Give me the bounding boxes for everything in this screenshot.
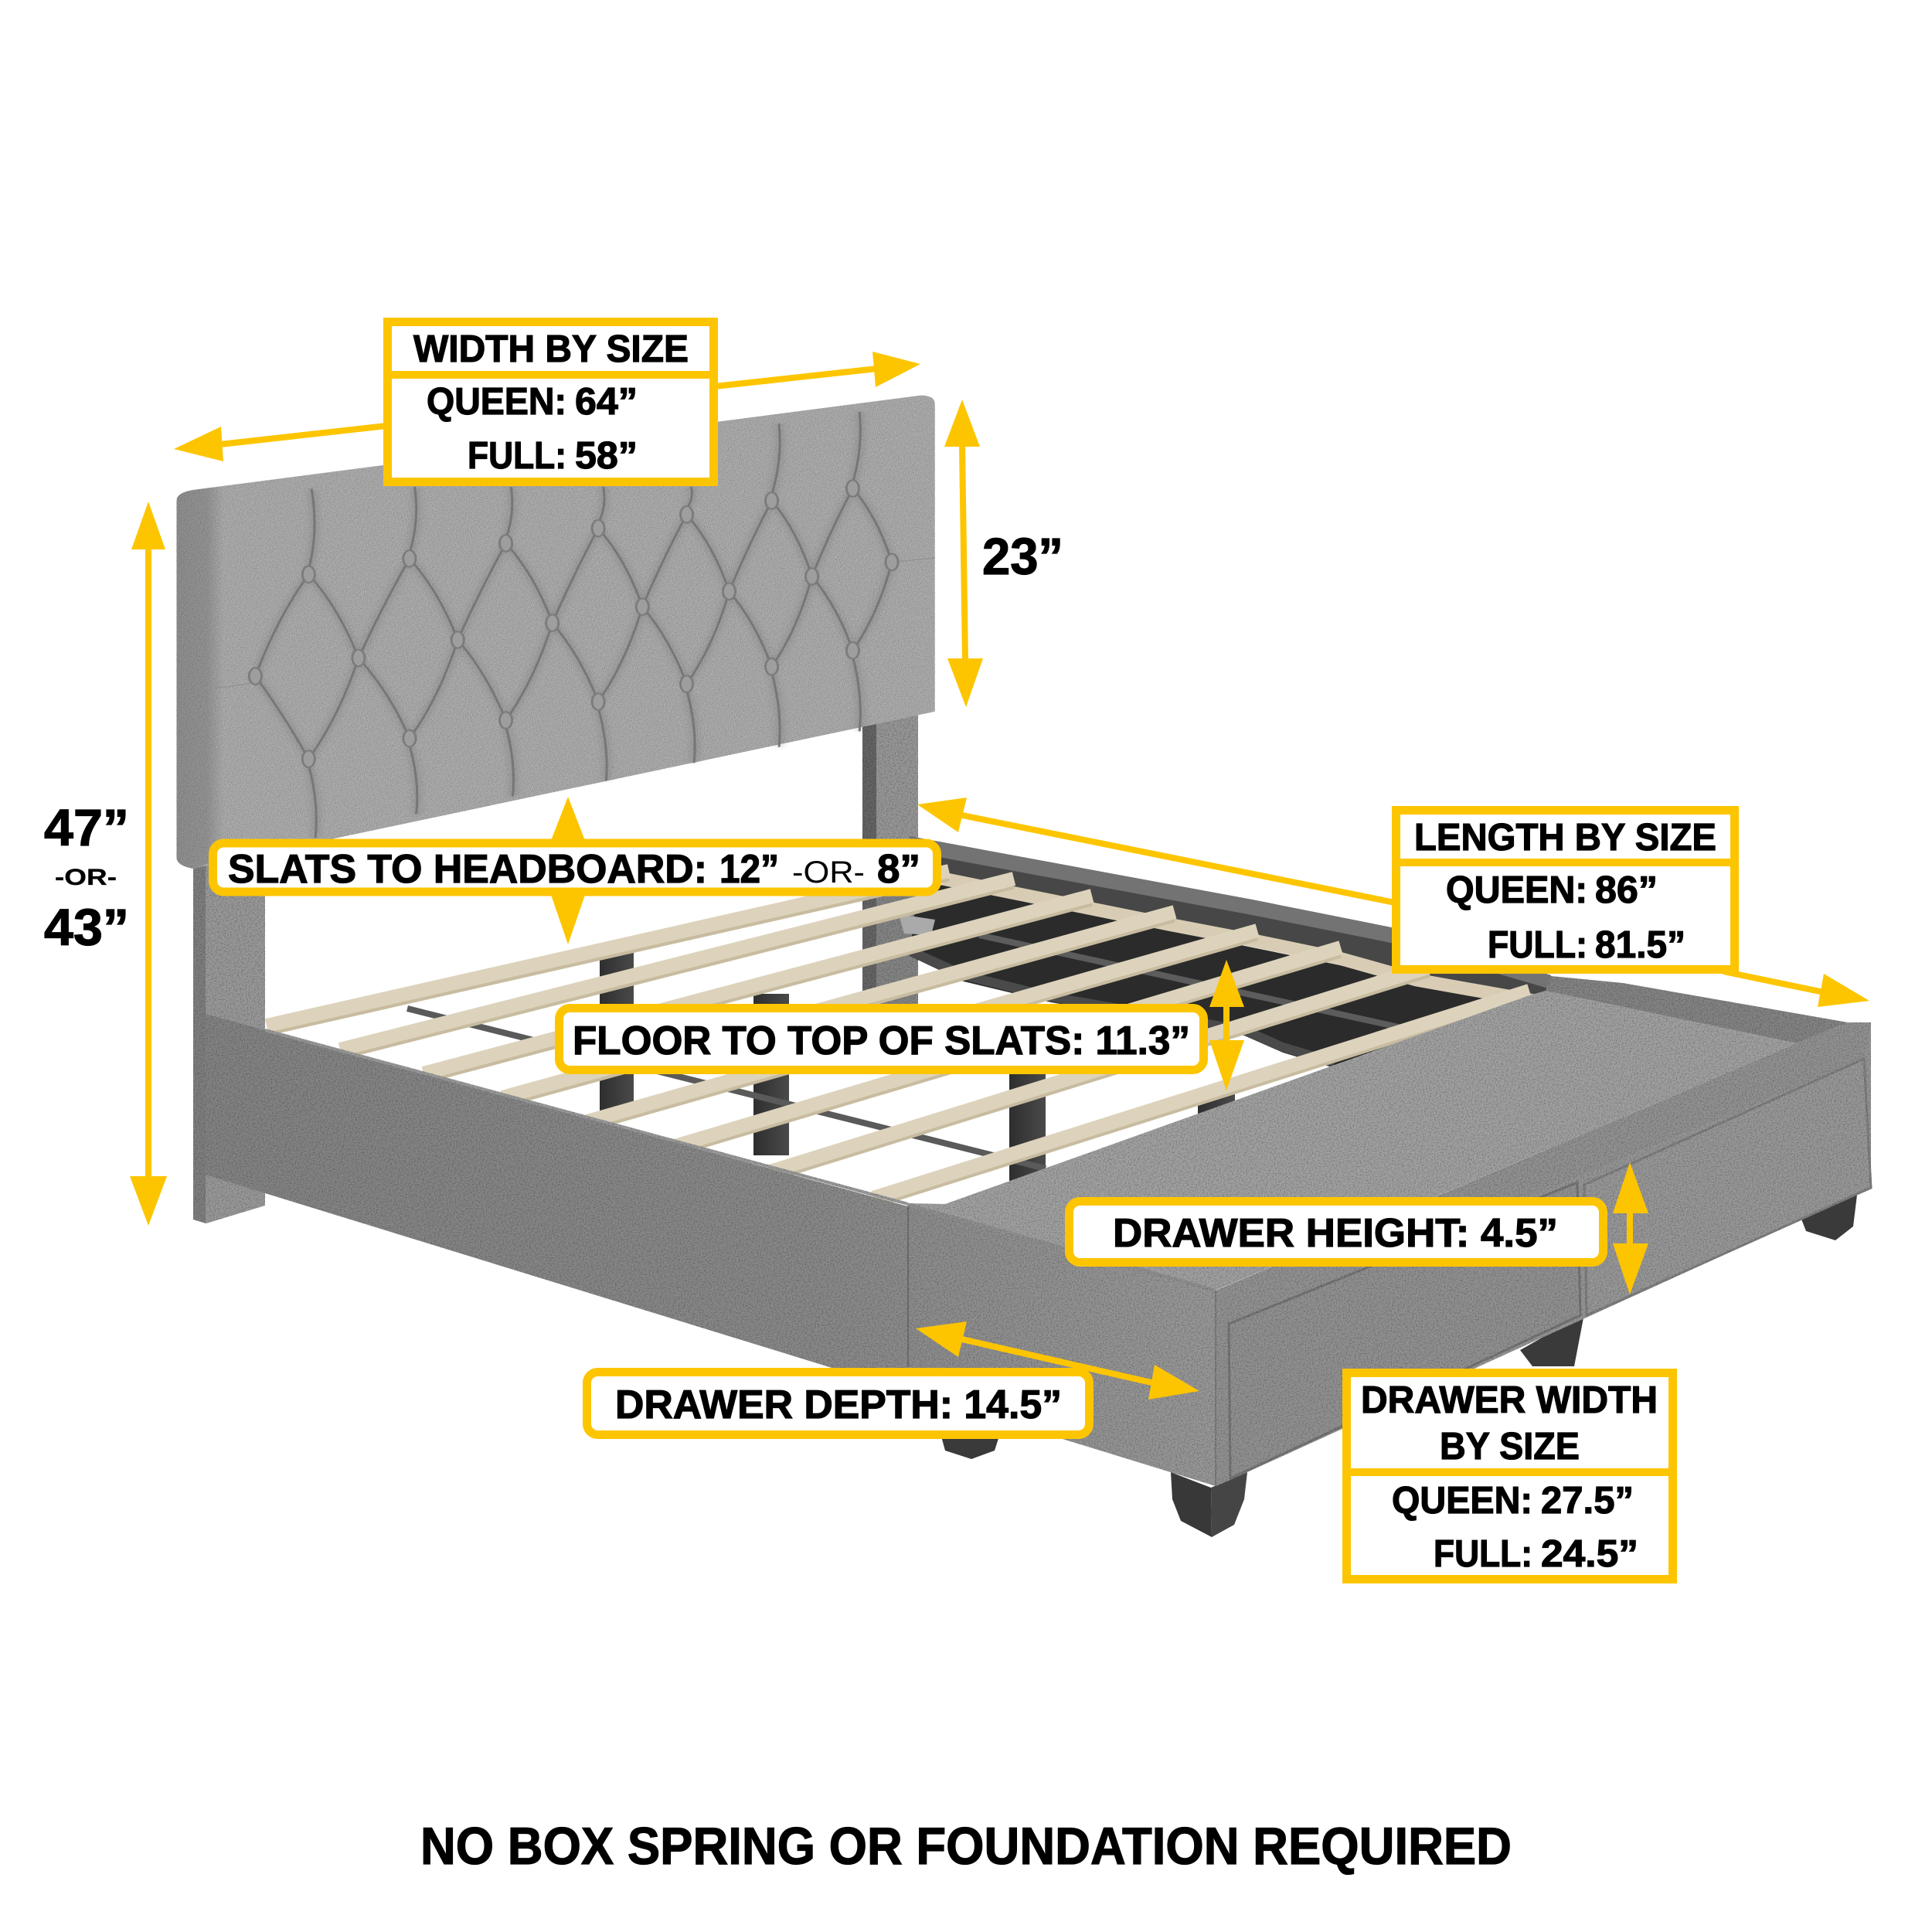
drawer depth label: DRAWER DEPTH: 14.5”	[615, 1383, 1062, 1427]
total height label: 43”	[44, 899, 129, 957]
drawer width by size box	[1342, 1372, 1677, 1580]
upholstered panel	[176, 396, 935, 869]
front foot	[1171, 1472, 1247, 1537]
front lip	[1216, 1022, 1871, 1486]
floor to top of slats label: FLOOR TO TOP OF SLATS: 11.3”	[573, 1019, 1190, 1063]
drawer width by size box: 27.5”	[1541, 1480, 1634, 1522]
slats to headboard label: 12”	[719, 847, 779, 892]
footer note: NO BOX SPRING OR FOUNDATION REQUIRED	[420, 1817, 1512, 1876]
drawer depth label	[587, 1372, 1090, 1434]
drawer height label: DRAWER HEIGHT: 4.5”	[1113, 1211, 1558, 1256]
total height arrow	[130, 502, 167, 1226]
headboard left post	[193, 858, 265, 1223]
drawer width by size box: BY SIZE	[1440, 1426, 1580, 1468]
length by size box: 81.5”	[1595, 924, 1685, 966]
seam	[907, 1206, 909, 1366]
drawer depth arrow	[916, 1321, 1199, 1400]
total height label: 47”	[44, 799, 129, 857]
drawer width by size box: 24.5”	[1541, 1533, 1638, 1575]
rail top highlight	[265, 1030, 908, 1204]
center legs	[600, 949, 1235, 1181]
length arrow	[917, 798, 1869, 1007]
width arrow	[174, 352, 920, 461]
side face	[206, 1014, 1216, 1486]
width by size box: QUEEN:	[427, 381, 566, 423]
rim rear wall	[1546, 976, 1848, 1043]
tufting seams	[255, 412, 892, 838]
drawer width by size box: QUEEN:	[1392, 1480, 1532, 1522]
total height label	[44, 799, 129, 957]
headboard height arrow	[944, 400, 983, 707]
slats to headboard arrow	[550, 797, 586, 944]
center beam	[407, 1009, 1046, 1168]
length by size box: 86”	[1595, 869, 1658, 911]
length by size box: FULL:	[1488, 924, 1587, 966]
length by size box: QUEEN:	[1446, 869, 1587, 911]
width by size box: 58”	[575, 435, 638, 477]
headboard right post	[862, 707, 918, 1009]
drawer width by size box: DRAWER WIDTH	[1361, 1379, 1658, 1421]
side rail and storage base	[206, 976, 1871, 1486]
width by size box: 64”	[575, 381, 638, 423]
back rail and dark interior	[899, 836, 1551, 1068]
width by size box: FULL:	[468, 435, 566, 477]
23 inch label: 23”	[982, 528, 1063, 586]
rear foot	[940, 1434, 1000, 1459]
side seams	[204, 558, 935, 688]
drawer one	[1229, 1182, 1580, 1478]
drawer height label	[1070, 1201, 1603, 1263]
tufting buttons	[249, 480, 898, 767]
slats to headboard label: SLATS TO HEADBOARD:	[228, 847, 707, 892]
right foot	[1801, 1182, 1859, 1240]
slats to headboard label: -OR-	[792, 855, 865, 889]
headboard	[176, 396, 935, 869]
corner edge	[1215, 1291, 1216, 1486]
length by size box: LENGTH BY SIZE	[1414, 817, 1716, 859]
front face	[1216, 1022, 1871, 1486]
base top edge	[908, 1205, 1215, 1291]
floor to slats arrow	[1209, 960, 1244, 1090]
length by size box	[1392, 810, 1739, 969]
wood slats	[267, 871, 1529, 1206]
width by size box: WIDTH BY SIZE	[413, 328, 689, 370]
center foot	[1520, 1314, 1584, 1366]
drawer height arrow	[1613, 1162, 1648, 1294]
drawer width by size box: FULL:	[1434, 1533, 1532, 1575]
width by size box	[383, 321, 718, 482]
slats to headboard label: 8”	[877, 847, 920, 892]
tufting shadow	[255, 412, 892, 838]
drawer two	[1584, 1059, 1871, 1315]
top surface	[908, 991, 1797, 1291]
slats to headboard label	[213, 843, 937, 892]
left edge shade	[176, 486, 223, 869]
total height label: -OR-	[55, 865, 117, 890]
